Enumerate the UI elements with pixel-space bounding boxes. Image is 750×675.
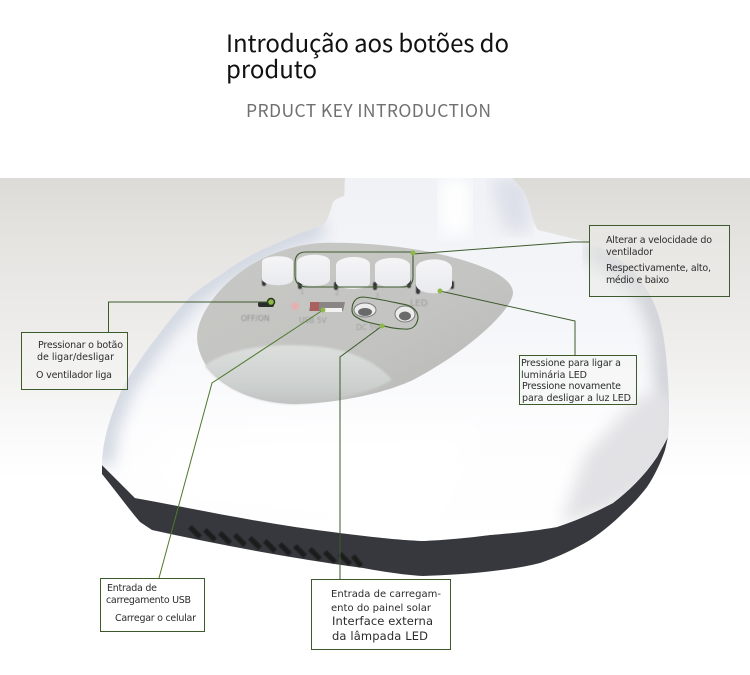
panel markings: DC 5V [356,323,380,332]
white shell [102,178,669,541]
callout: fan speed [295,226,730,296]
label text: Carregar o celular [115,613,196,624]
label text: Respectivamente, alto, [606,263,711,274]
subtitle: PRDUCT KEY INTRODUCTION [246,98,491,123]
label text: da lâmpada LED [332,629,428,643]
label text: luminária LED [521,370,587,381]
label box [312,580,450,650]
title: Introdução aos botões do [226,24,509,59]
title [226,24,509,85]
label text: médio e baixo [606,275,669,286]
label text: Pressione para ligar a [521,358,621,369]
label text [36,340,123,381]
label text: Pressionar o botão [38,340,123,351]
outline around DC jacks [352,297,418,329]
leader line [340,326,382,579]
title: produto [226,50,317,85]
label text [106,583,196,624]
label text: ento do painel solar [331,603,432,614]
label box [520,356,636,404]
leader line [440,291,575,355]
panel markings [241,288,428,332]
panel markings: LED [410,299,428,309]
panel markings: 2 [335,289,339,297]
panel markings: 1 [300,288,304,296]
label text: de ligar/desligar [37,352,114,363]
label text: O ventilador liga [36,370,112,381]
label text: ventilador [606,247,653,258]
label text [521,358,631,404]
shell shading [102,178,675,525]
panel lens dome [205,345,392,404]
leader dot [380,324,384,328]
callout: USB port [100,308,326,632]
label box [22,332,128,390]
dark base [102,437,668,576]
leader dot [410,250,416,256]
panel markings: OFF/ON [241,314,270,323]
leader line [108,302,268,332]
control panel [197,243,513,404]
label box [100,578,204,632]
leader line [413,242,589,254]
button shadows [262,278,454,294]
label box [590,226,730,296]
label text: para desligar a luz LED [522,393,631,404]
label text: Entrada de [107,583,157,594]
leader line [159,310,323,578]
callout: LED button [438,288,636,404]
product: fan base [102,178,675,576]
label text [606,235,712,286]
label text: Entrada de carregam- [331,589,441,600]
callout: DC ports [312,297,450,650]
dc jacks [354,303,415,322]
leader dot [320,308,326,312]
outline around speed buttons [295,252,413,287]
red indicator [292,302,298,310]
switch ring [268,298,274,306]
on/off switch [258,302,274,307]
leader dot [438,288,442,294]
label text: carregamento USB [106,595,191,606]
label text: Pressione novamente [522,381,621,392]
usb port [309,302,345,312]
label text: Alterar a velocidade do [606,235,712,246]
panel markings: 3 [375,292,379,300]
label text [331,589,441,643]
vent slots [190,527,361,566]
panel markings: USB 5V [299,316,328,325]
buttons [262,255,454,294]
callout: power button [22,298,274,390]
label text: Interface externa [332,614,433,628]
